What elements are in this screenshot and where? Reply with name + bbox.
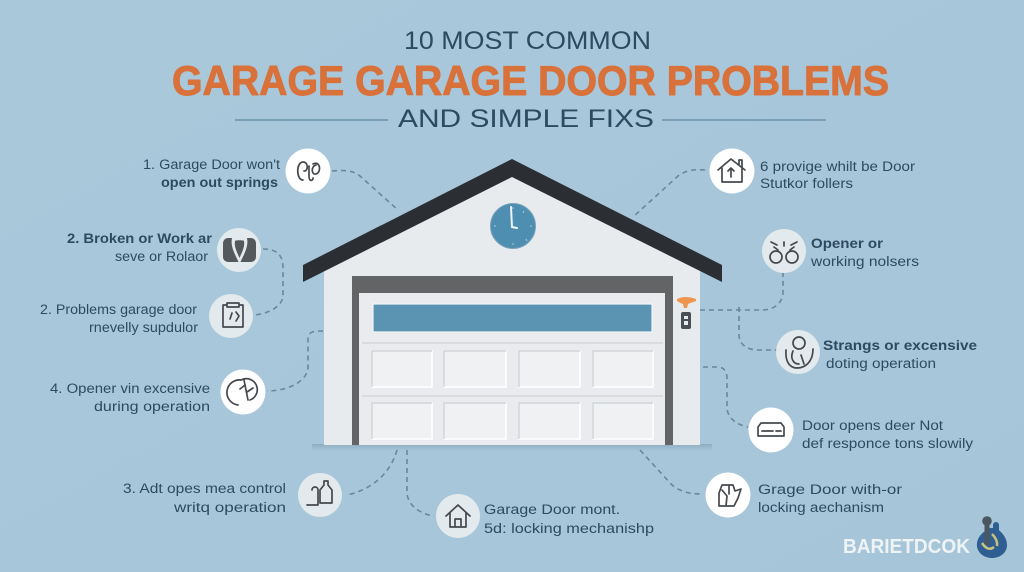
logo icon bbox=[977, 516, 1007, 558]
text: 2. Problems garage door bbox=[40, 302, 198, 317]
wall bbox=[324, 172, 700, 445]
title bbox=[172, 27, 889, 133]
clock bbox=[490, 204, 536, 248]
connector lines bbox=[255, 170, 783, 516]
icon: shield bbox=[217, 228, 261, 272]
text: Garage Door mont. bbox=[484, 502, 620, 517]
text: seve or Rolaor bbox=[115, 249, 209, 264]
icon: opener unit bbox=[748, 408, 794, 452]
icon: house bbox=[436, 494, 480, 538]
icon: house with lock bbox=[710, 148, 754, 194]
text: def responce tons slowily bbox=[802, 436, 973, 451]
keypad and orange sensor bbox=[677, 297, 696, 329]
text bbox=[40, 302, 199, 335]
door window bbox=[373, 304, 652, 332]
text: 1. Garage Door won't bbox=[143, 157, 280, 172]
icon: clipboard bbox=[209, 294, 253, 338]
callout 4 bbox=[50, 370, 266, 414]
callout 6 bbox=[710, 148, 916, 194]
text: rnevelly supdulor bbox=[89, 320, 199, 335]
text: Door opens deer Not bbox=[802, 418, 943, 433]
text bbox=[67, 231, 213, 264]
text: locking aechanism bbox=[758, 500, 884, 515]
text: Strangs or excensive bbox=[823, 338, 978, 353]
callout 2 bbox=[67, 228, 261, 272]
callout 3 bbox=[40, 294, 253, 338]
text: 2. Broken or Work ar bbox=[67, 231, 213, 246]
text: doting operation bbox=[826, 356, 936, 371]
house bbox=[303, 159, 722, 451]
text bbox=[143, 157, 280, 190]
heading: and simple fixes: AND SIMPLE FIXS bbox=[398, 105, 654, 133]
icon: rollers bbox=[762, 229, 806, 273]
text bbox=[758, 482, 903, 515]
text bbox=[802, 418, 973, 451]
text: Stutkor follers bbox=[760, 176, 853, 191]
icon: spring bbox=[286, 148, 330, 194]
icon: circled leaf bbox=[220, 370, 266, 414]
callout 1 bbox=[143, 148, 330, 194]
text bbox=[484, 502, 654, 536]
text bbox=[123, 481, 286, 515]
callout 9 bbox=[748, 408, 973, 452]
text bbox=[823, 338, 978, 371]
icon: bottles bbox=[298, 473, 342, 517]
callout 10 bbox=[706, 472, 903, 518]
icon: broken panel bbox=[706, 472, 750, 518]
text bbox=[760, 159, 916, 191]
garage door bbox=[359, 293, 665, 445]
callout 8 bbox=[776, 330, 978, 374]
text: 4. Opener vin excensive bbox=[50, 381, 210, 396]
icon: spring figure bbox=[776, 330, 820, 374]
door frame bbox=[352, 276, 673, 445]
shadow bbox=[312, 444, 712, 451]
logo wordmark: BARIETDCOK bbox=[843, 536, 971, 558]
heading: 10 most common: 10 MOST COMMON bbox=[404, 27, 651, 55]
text: 3. Adt opes mea control bbox=[123, 481, 286, 496]
text: open out springs bbox=[161, 175, 278, 190]
text: writq operation bbox=[173, 500, 286, 515]
text: working nolsers bbox=[810, 254, 919, 269]
text: Grage Door with-or bbox=[758, 482, 903, 497]
callout: bottom centre bbox=[436, 494, 654, 538]
text: during operation bbox=[94, 399, 210, 414]
logo bbox=[843, 516, 1007, 558]
text bbox=[810, 236, 919, 269]
text: 5d: locking mechanishp bbox=[484, 521, 654, 536]
roof bbox=[303, 159, 722, 282]
text: Opener or bbox=[811, 236, 884, 251]
callout 7 bbox=[762, 229, 919, 273]
heading: garage door problems: GARAGE GARAGE DOOR PROBLEMS bbox=[172, 57, 889, 104]
text: 6 provige whilt be Door bbox=[760, 159, 916, 174]
callout 5 bbox=[123, 473, 342, 517]
text bbox=[50, 381, 210, 414]
